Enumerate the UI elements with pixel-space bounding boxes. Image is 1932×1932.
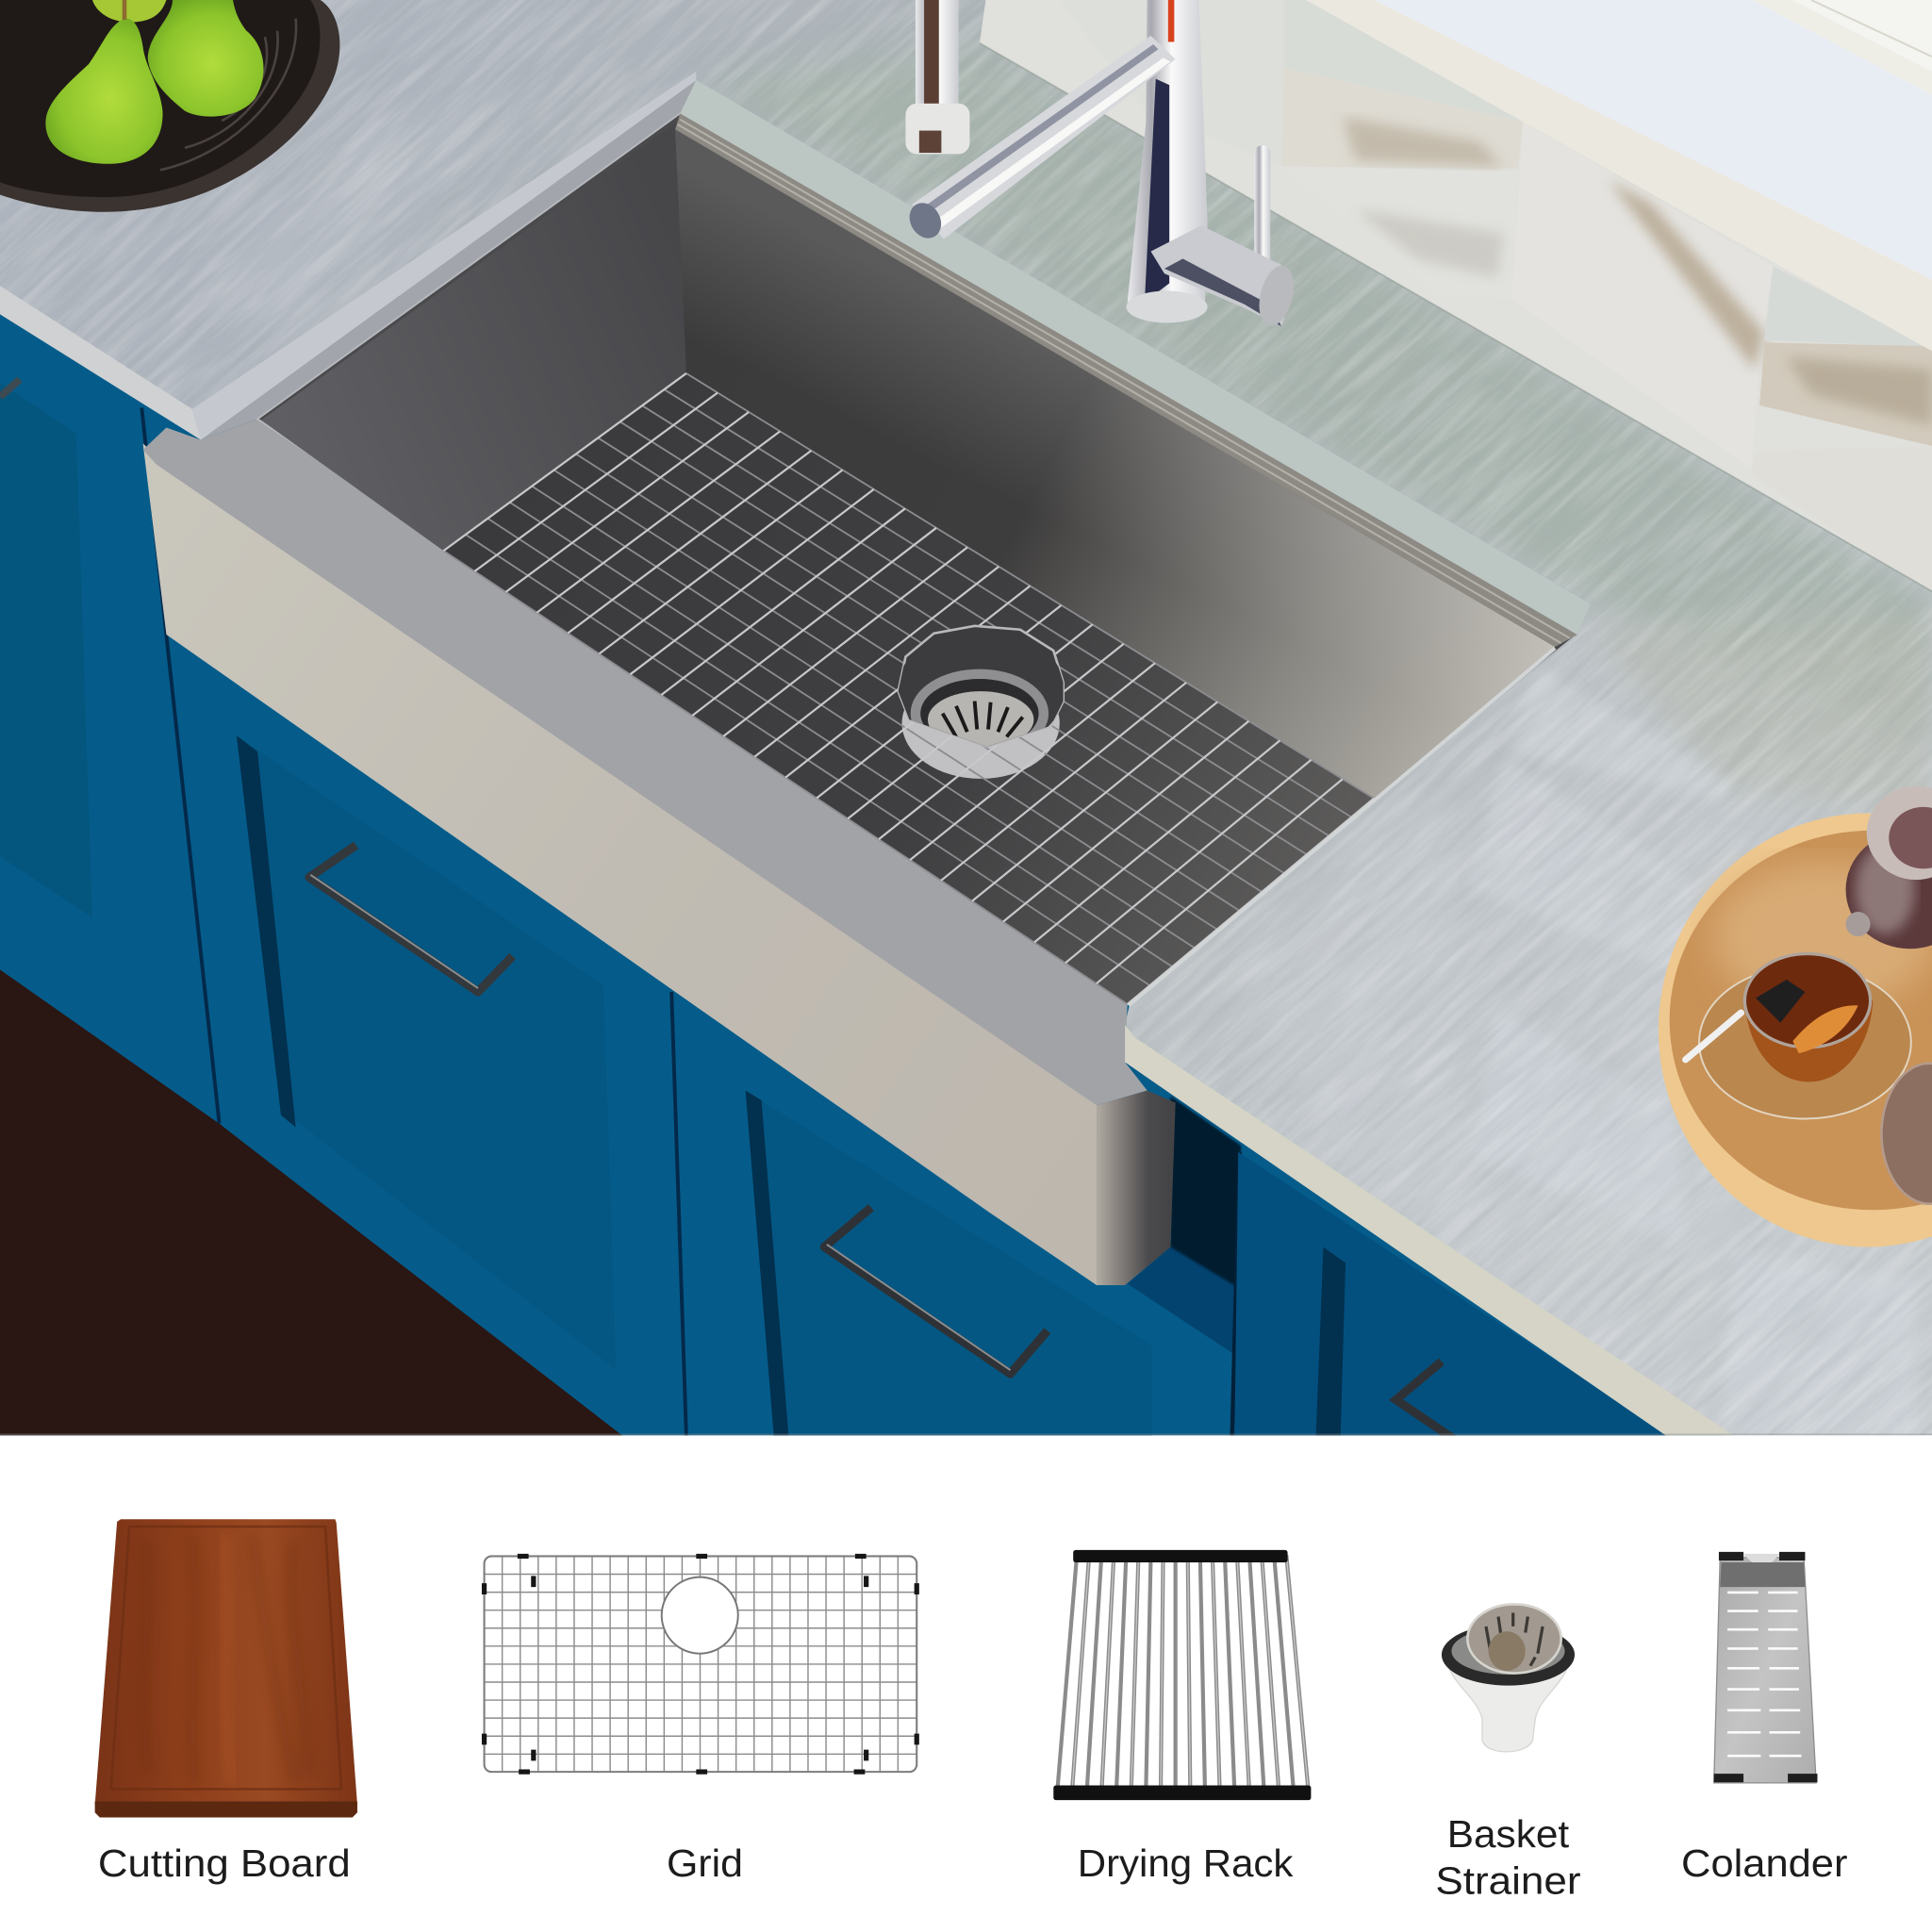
label: basket strainer bbox=[1435, 1812, 1581, 1902]
spoon bbox=[1686, 1013, 1741, 1060]
left counter edge towards sink bbox=[192, 72, 696, 440]
cabinet: shadowed side drawer bbox=[1128, 1097, 1241, 1435]
cabinet: centre door with handle bbox=[237, 735, 686, 1435]
sink apron corner bbox=[1097, 1090, 1176, 1285]
sink front rim bbox=[143, 419, 1148, 1105]
basin left wall bbox=[261, 124, 686, 551]
back wall stepped ledge bbox=[675, 113, 1577, 647]
basin back wall bbox=[675, 129, 1555, 799]
colander top bridge bbox=[1742, 1554, 1780, 1562]
marble backsplash bbox=[973, 0, 1932, 603]
accessory: colander bbox=[1714, 1554, 1817, 1783]
cabinet base colour bbox=[0, 296, 1725, 1435]
board thickness bbox=[95, 1801, 357, 1817]
basket slots bbox=[1486, 1613, 1543, 1666]
dark bowl bbox=[0, 0, 339, 212]
right counter front edge bbox=[1125, 1025, 1734, 1435]
wooden tray with teapot and cups bbox=[1659, 786, 1932, 1247]
stone countertop bbox=[0, 0, 1932, 1435]
teapot bbox=[1846, 786, 1932, 949]
photo bottom edge bbox=[0, 1433, 1932, 1435]
pear stem bbox=[123, 0, 126, 20]
faucet bbox=[903, 0, 1299, 329]
accessory: cutting board bbox=[95, 1519, 357, 1817]
sink apron front bbox=[143, 443, 1097, 1285]
back wall light falloff bbox=[675, 129, 1555, 799]
colander clips bbox=[1714, 1556, 1817, 1778]
tea surface bbox=[1744, 953, 1871, 1048]
pear left bbox=[45, 19, 163, 164]
grid drain opening bbox=[662, 1577, 738, 1654]
pull-down sprayer bbox=[905, 0, 969, 154]
accessory: drying rack bbox=[1053, 1550, 1311, 1800]
label: drying rack: Drying Rack bbox=[1078, 1841, 1294, 1885]
sink basin opening bbox=[257, 113, 1577, 1004]
cabinet: left door bbox=[0, 379, 220, 1124]
strainer black gasket bbox=[1442, 1624, 1575, 1686]
strainer white body bbox=[1445, 1651, 1572, 1752]
right counter edge towards sink bbox=[1129, 648, 1555, 1005]
panel: kitchen sink photo bbox=[0, 0, 1932, 1439]
rack bottom bar bbox=[1053, 1785, 1311, 1800]
pear right bbox=[148, 0, 264, 117]
cabinet: right door with handle bbox=[746, 1090, 1152, 1435]
back edge of countertop bbox=[980, 43, 1932, 591]
cabinet: far right door with handle bbox=[1234, 1152, 1670, 1439]
back counter edge towards sink bbox=[680, 80, 1591, 635]
rack top bar bbox=[1073, 1550, 1288, 1562]
tray wood highlight bbox=[1712, 863, 1932, 1011]
tray rim bbox=[1659, 813, 1932, 1247]
tray base bbox=[1670, 831, 1932, 1210]
grid rubber bumpers bbox=[485, 1556, 916, 1772]
farmhouse sink bbox=[143, 80, 1591, 1285]
second glass bbox=[1881, 1064, 1932, 1204]
label: colander: Colander bbox=[1681, 1841, 1848, 1885]
rack rods bbox=[1057, 1555, 1309, 1792]
left counter front edge bbox=[0, 286, 201, 440]
basket bbox=[1467, 1604, 1561, 1674]
board groove bbox=[111, 1527, 341, 1789]
label: grid: Grid bbox=[667, 1841, 743, 1885]
colander back wall bbox=[1720, 1562, 1805, 1587]
basin floor bbox=[443, 373, 1374, 1004]
faucet handle bbox=[1151, 145, 1299, 329]
wire bottom grid bbox=[443, 373, 1374, 1004]
faucet spout arm bbox=[903, 36, 1176, 244]
grid wires bbox=[485, 1556, 916, 1772]
drain with strainer bbox=[897, 626, 1065, 779]
basket knob bbox=[1489, 1631, 1526, 1671]
label: basket strainer: Basket bbox=[1447, 1812, 1570, 1856]
orange slice bbox=[1792, 1005, 1858, 1053]
tea cup bbox=[1744, 1000, 1873, 1082]
fruit bowl with pears bbox=[0, 0, 339, 212]
bowl inner bbox=[0, 0, 320, 197]
white window sill bbox=[1306, 0, 1932, 351]
accessory: wire grid bbox=[485, 1556, 916, 1772]
colander tray bbox=[1714, 1558, 1816, 1783]
board top bbox=[95, 1519, 357, 1805]
pear back bbox=[92, 0, 166, 23]
faucet column bbox=[1126, 0, 1208, 322]
bowl rings bbox=[160, 19, 296, 170]
sink outer rim bbox=[201, 80, 1591, 1004]
wood grain bbox=[143, 1534, 308, 1784]
label: basket strainer: Strainer bbox=[1435, 1858, 1581, 1902]
colander slots bbox=[1727, 1593, 1801, 1756]
rack rod highlights bbox=[1072, 1555, 1309, 1792]
drain dish under the grid bbox=[902, 668, 1060, 779]
ledge lines bbox=[678, 120, 1570, 643]
tea leaf bbox=[1756, 980, 1805, 1023]
glass saucer bbox=[1699, 966, 1911, 1119]
label: cutting board: Cutting Board bbox=[98, 1841, 351, 1885]
strainer inner ring bbox=[1451, 1627, 1565, 1675]
wood floor bbox=[0, 969, 622, 1435]
accessory: basket strainer bbox=[1442, 1604, 1575, 1752]
grid frame bbox=[485, 1556, 916, 1772]
